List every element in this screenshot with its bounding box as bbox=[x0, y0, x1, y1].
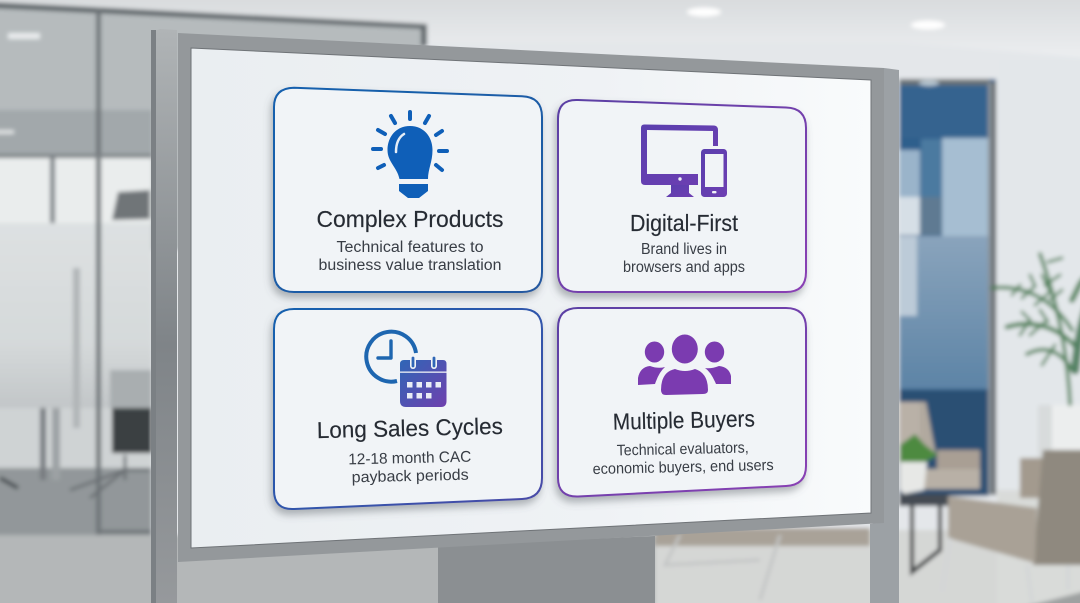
description bbox=[318, 239, 502, 274]
icon: light bulb bbox=[373, 112, 447, 198]
description: payback periods bbox=[351, 467, 469, 486]
right doorway glass bbox=[899, 79, 996, 495]
card: Digital-First bbox=[558, 100, 806, 292]
right post bbox=[870, 68, 899, 603]
right wall and plant bbox=[997, 58, 1080, 500]
description: 12-18 month CAC bbox=[348, 449, 471, 468]
description: business value translation bbox=[318, 257, 502, 274]
description: Brand lives in bbox=[641, 241, 727, 258]
card: Complex Products bbox=[274, 88, 542, 292]
heading: Multiple Buyers bbox=[613, 405, 755, 435]
ceiling lights bbox=[687, 8, 721, 16]
board frame bbox=[178, 33, 884, 562]
icon: monitor and phone bbox=[641, 124, 727, 197]
description: Technical evaluators, bbox=[617, 440, 749, 460]
description bbox=[592, 439, 774, 478]
icon: group of people bbox=[638, 334, 731, 395]
heading: Complex Products bbox=[316, 206, 504, 232]
board panel bbox=[191, 48, 871, 548]
card: Multiple Buyers bbox=[558, 308, 806, 497]
heading: Digital-First bbox=[630, 210, 739, 236]
lounge furniture bbox=[899, 402, 920, 462]
description bbox=[348, 449, 472, 486]
description: economic buyers, end users bbox=[592, 457, 774, 478]
left post bbox=[151, 29, 177, 603]
icon: clock and calendar bbox=[366, 332, 446, 407]
description: browsers and apps bbox=[623, 259, 745, 276]
description: Technical features to bbox=[336, 239, 484, 256]
heading: Long Sales Cycles bbox=[317, 413, 503, 443]
card: Long Sales Cycles bbox=[274, 309, 542, 509]
display stand pedestal bbox=[438, 536, 655, 603]
description bbox=[623, 241, 745, 276]
